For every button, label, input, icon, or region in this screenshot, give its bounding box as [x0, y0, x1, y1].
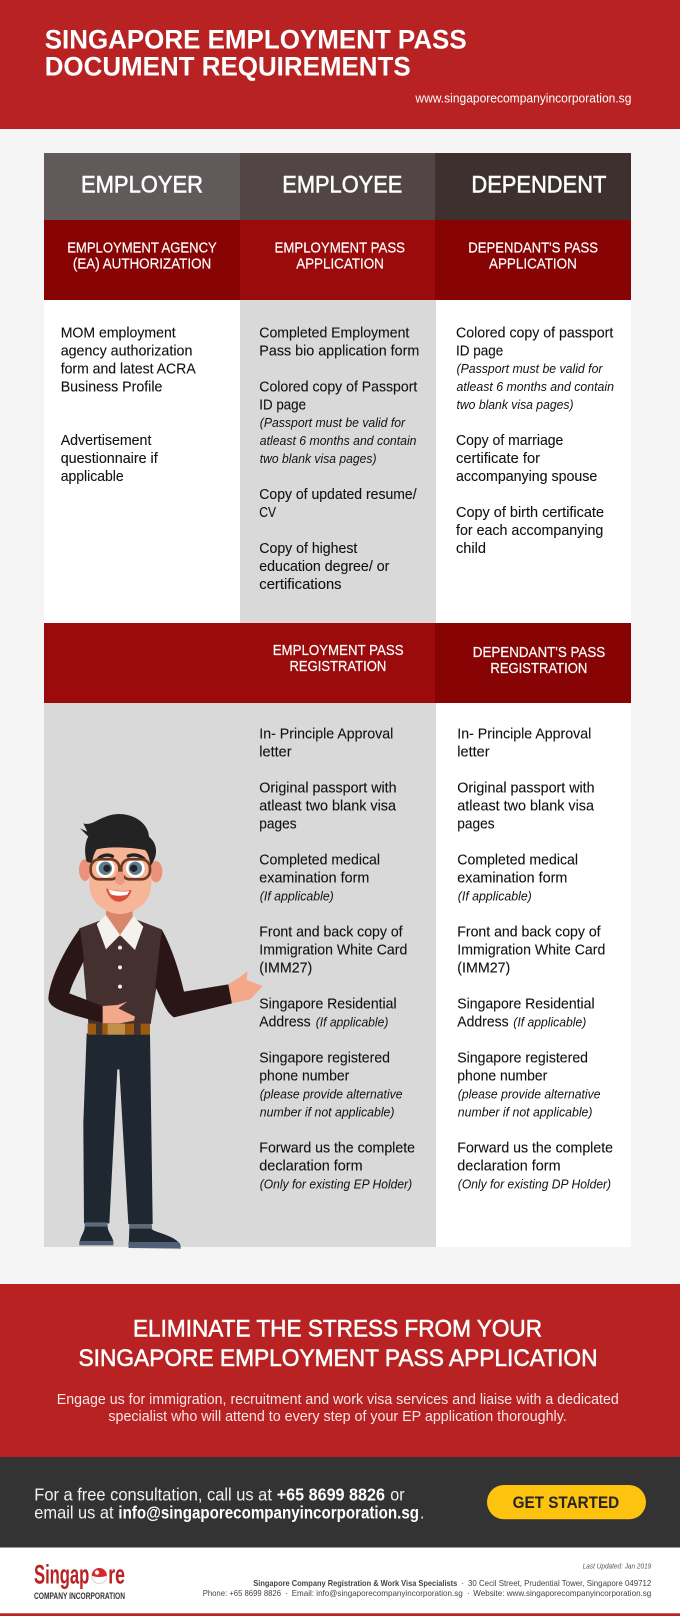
- company address and contacts: ·: [285, 1588, 288, 1598]
- contact text: .: [420, 1503, 425, 1523]
- panel: employee registration documents: Original passport with: [259, 779, 397, 796]
- panel: footer: [0, 1548, 680, 1616]
- panel: employee registration documents: (IMM27): [259, 959, 312, 976]
- panel: dependent registration documents: pages: [457, 815, 495, 832]
- panel: employee application documents: (Passport must be valid for: [260, 416, 406, 430]
- company address and contacts: Phone: +65 8699 8826: [203, 1588, 281, 1598]
- panel: employee registration documents: Front and back copy of: [259, 923, 403, 940]
- sub-heading: dependant's pass application: APPLICATION: [489, 256, 577, 272]
- panel: registration sub-headings: [44, 623, 631, 703]
- heading: employer: [44, 153, 240, 220]
- panel: dependent registration documents: Original passport with: [457, 779, 595, 796]
- button: get started: GET STARTED: [513, 1494, 619, 1512]
- sub-heading: dependant's pass application: [435, 220, 631, 300]
- panel: dependent registration documents: Forward us the complete: [457, 1139, 613, 1156]
- logo: Singapore Company Incorporation: re: [108, 1559, 125, 1589]
- panel: employer application documents: form and latest ACRA: [61, 360, 196, 378]
- panel: dependent application documents: for each accompanying: [456, 522, 603, 539]
- logo: Singapore Company Incorporation: [34, 1559, 125, 1602]
- sub-heading: dependant's pass registration: DEPENDANT'S PASS: [473, 645, 605, 661]
- panel: employee application documents: Copy of highest: [259, 540, 358, 557]
- panel: dependent application documents: child: [456, 540, 486, 557]
- panel: dependent application documents: two blank visa pages): [456, 398, 574, 412]
- title: DOCUMENT REQUIREMENTS: [45, 52, 411, 82]
- company address and contacts: ·: [467, 1588, 470, 1598]
- panel: dependent registration documents: number if not applicable): [458, 1105, 592, 1119]
- panel: employee registration documents: (If applicable): [260, 889, 334, 903]
- panel: employee application documents: atleast 6 months and contain: [260, 434, 417, 448]
- panel: dependent registration documents: Address: [457, 1013, 509, 1030]
- panel: dependent registration documents: Singapore Residential: [457, 995, 595, 1012]
- panel: employee application documents: two blank visa pages): [260, 452, 376, 466]
- panel: dependent registration documents: Front and back copy of: [457, 923, 601, 940]
- sub-heading: dependant's pass registration: REGISTRATION: [490, 661, 587, 677]
- heading: employer: EMPLOYER: [81, 172, 203, 199]
- heading: employee: [240, 153, 435, 220]
- panel: dependent registration documents: examination form: [457, 869, 567, 886]
- panel: dependent registration documents: (Only for existing DP Holder): [458, 1177, 611, 1191]
- panel: contact bar: [0, 1457, 680, 1548]
- panel: employee registration documents: Address: [259, 1013, 311, 1030]
- panel: employee registration documents: (Only for existing EP Holder): [260, 1177, 412, 1191]
- panel: dependent application documents: Colored copy of passport: [456, 324, 614, 342]
- panel: dependent registration documents: (If applicable): [513, 1015, 586, 1029]
- panel: employee registration documents: letter: [259, 743, 292, 760]
- banner heading: SINGAPORE EMPLOYMENT PASS APPLICATION: [78, 1345, 598, 1372]
- panel: dependent application documents: certificate for: [456, 450, 540, 467]
- sub-heading: employment agency authorization: [44, 220, 240, 300]
- panel: employer application documents: [44, 300, 240, 623]
- banner heading: ELIMINATE THE STRESS FROM YOUR: [133, 1316, 542, 1343]
- illustration: man in glasses pointing to the documents: [48, 814, 263, 1249]
- panel: employer application documents: applicable: [61, 468, 124, 485]
- panel: dependent registration documents: declaration form: [457, 1157, 561, 1174]
- panel: employer application documents: MOM employment: [61, 324, 176, 342]
- panel: dependent registration documents: (please provide alternative: [458, 1087, 601, 1101]
- last updated note: Last Updated: Jan 2019: [583, 1564, 651, 1571]
- company address and contacts: 30 Cecil Street, Prudential Tower, Singapore 049712: [468, 1578, 652, 1588]
- sub-heading: employment agency authorization: (EA) AUTHORIZATION: [73, 256, 211, 272]
- panel: column headings: [44, 153, 631, 220]
- panel: employee application documents: certifications: [259, 576, 342, 593]
- panel: dependent application documents: (Passport must be valid for: [456, 362, 603, 376]
- panel: employee registration documents: In- Principle Approval: [259, 725, 393, 742]
- logo: Singapore Company Incorporation: COMPANY INCORPORATION: [34, 1591, 125, 1602]
- panel: dependent registration documents: letter: [457, 743, 490, 760]
- title: [45, 24, 467, 82]
- panel: dependent registration documents: Singapore registered: [457, 1049, 588, 1066]
- panel: employee registration documents: declaration form: [259, 1157, 363, 1174]
- panel: employee registration documents: Singapore registered: [259, 1049, 390, 1066]
- sub-heading: employment pass application: [240, 220, 435, 300]
- sub-heading: employment pass application: EMPLOYMENT PASS: [274, 240, 405, 256]
- panel: employer application documents: Advertisement: [61, 432, 152, 449]
- panel: employer application documents: Business Profile: [61, 378, 162, 396]
- panel: application sub-headings: [44, 220, 631, 300]
- panel: employer application documents: agency authorization: [61, 342, 192, 360]
- banner description: specialist who will attend to every step of your EP application thoroughly.: [108, 1408, 567, 1425]
- title banner: [0, 0, 680, 129]
- panel: employee registration documents: Forward us the complete: [259, 1139, 415, 1156]
- heading: dependent: [435, 153, 631, 220]
- panel: employee registration documents: atleast two blank visa: [259, 797, 397, 814]
- panel: dependent application documents: accompanying spouse: [456, 468, 597, 485]
- panel: dependent registration documents: atleast two blank visa: [457, 797, 595, 814]
- sub-heading: employment pass registration: REGISTRATION: [290, 659, 386, 675]
- panel: employee application documents: ID page: [259, 396, 306, 414]
- panel: employee application documents: education degree/ or: [259, 558, 389, 575]
- panel: employee application documents: Copy of updated resume/: [259, 486, 417, 503]
- sub-heading: employment agency authorization: EMPLOYMENT AGENCY: [67, 240, 217, 256]
- panel: dependent application documents: atleast 6 months and contain: [456, 380, 614, 394]
- title: SINGAPORE EMPLOYMENT PASS: [45, 24, 467, 54]
- banner heading: [78, 1316, 598, 1372]
- panel: employee registration documents: [44, 703, 436, 1247]
- contact text: info@singaporecompanyincorporation.sg: [118, 1503, 419, 1523]
- panel: dependent registration documents: [436, 703, 631, 1247]
- panel: employee registration documents: Immigration White Card: [259, 941, 407, 958]
- panel: dependent registration documents: Immigration White Card: [457, 941, 605, 958]
- panel: dependent registration documents: (If applicable): [458, 889, 532, 903]
- sub-heading: dependant's pass application: DEPENDANT'S PASS: [468, 240, 598, 256]
- contact text: or: [390, 1485, 405, 1505]
- heading: dependent: DEPENDENT: [471, 172, 607, 199]
- contact text: For a free consultation, call us at: [34, 1485, 272, 1505]
- panel: employee application documents: CV: [259, 504, 276, 521]
- banner description: Engage us for immigration, recruitment and work visa services and liaise with a dedicated: [57, 1391, 619, 1408]
- panel: employee registration documents: pages: [259, 815, 297, 832]
- panel: dependent application documents: ID page: [456, 342, 503, 360]
- panel: dependent registration documents: Completed medical: [457, 851, 578, 868]
- company address and contacts: [203, 1578, 652, 1598]
- heading: employee: EMPLOYEE: [282, 172, 402, 199]
- panel: employee registration documents: number if not applicable): [260, 1105, 394, 1119]
- panel: employee registration documents: (If applicable): [316, 1015, 388, 1029]
- website url: www.singaporecompanyincorporation.sg: [414, 91, 631, 106]
- panel: employee application documents: Pass bio application form: [259, 342, 419, 360]
- contact text: +65 8699 8826: [277, 1485, 385, 1505]
- panel: employee application documents: Colored copy of Passport: [259, 378, 418, 396]
- panel: employee registration documents: Completed medical: [259, 851, 380, 868]
- button: get started: [487, 1485, 646, 1519]
- panel: employee registration documents: examination form: [259, 869, 369, 886]
- panel: employee registration documents: phone number: [259, 1067, 349, 1084]
- contact text: [34, 1485, 425, 1523]
- company address and contacts: ·: [461, 1578, 464, 1588]
- panel: employee application documents: Completed Employment: [259, 324, 410, 342]
- sub-heading: dependant's pass registration: [473, 645, 605, 677]
- panel: dependent application documents: [436, 300, 631, 623]
- icon: Singapore flag ball: [92, 1568, 107, 1584]
- sub-heading: employment pass application: APPLICATION: [296, 256, 384, 272]
- panel: dependent application documents: Copy of birth certificate: [456, 504, 604, 521]
- company address and contacts: Singapore Company Registration & Work Visa Specialists: [253, 1578, 458, 1588]
- sub-heading: employment pass registration: [273, 643, 404, 675]
- panel: employee application documents: [240, 300, 436, 623]
- logo: Singapore Company Incorporation: Singap: [34, 1559, 89, 1589]
- banner description: [57, 1391, 619, 1425]
- panel: employee registration documents: (please provide alternative: [260, 1087, 403, 1101]
- company address and contacts: Email: info@singaporecompanyincorporation.sg: [292, 1588, 463, 1598]
- panel: dependent registration documents: In- Principle Approval: [457, 725, 591, 742]
- panel: dependent registration documents: (IMM27): [457, 959, 510, 976]
- company address and contacts: Website: www.singaporecompanyincorporation.sg: [473, 1588, 652, 1598]
- panel: dependent registration documents: phone number: [457, 1067, 547, 1084]
- panel: employee registration documents: Singapore Residential: [259, 995, 397, 1012]
- panel: employer application documents: questionnaire if: [61, 450, 158, 467]
- contact text: email us at: [34, 1503, 114, 1523]
- sub-heading: employment pass registration: EMPLOYMENT PASS: [273, 643, 404, 659]
- panel: dependent application documents: Copy of marriage: [456, 432, 563, 449]
- panel: call to action banner: [0, 1284, 680, 1457]
